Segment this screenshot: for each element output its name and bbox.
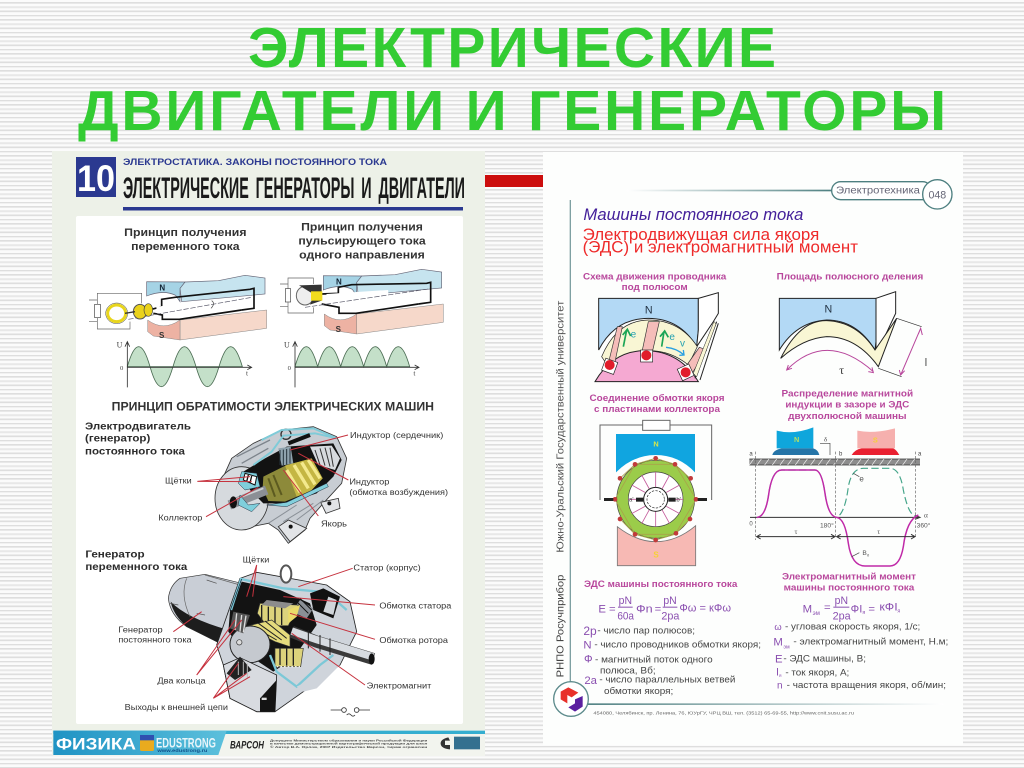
chart: flux and EMF distribution: e [859,474,864,483]
header line and tab: 048 [928,189,946,201]
motor callouts: Индуктор [349,477,390,487]
illustration: AC generator [168,565,375,712]
footer address: 454080, Челябинск, пр. Ленина, 76, ЮУрГУ, ЧРЦ ВШ, тел. (3512) 65-69-55, http://www.cnit.susu.ac.ru [593,710,855,715]
panel: left poster [52,151,485,756]
legend: EMF symbols: полюса, Вб; [600,665,656,675]
symbol: AC source [331,708,370,716]
formula: torque: pN [835,595,848,607]
legend: EMF symbols: - число пар полюсов; [597,625,695,635]
diagram: pulsating current generator [280,269,443,334]
footer banner: www.edustrong.ru [156,748,208,753]
left vertical rule [570,200,571,683]
label: DC motor [85,421,191,458]
heading: winding connection: с пластинами коллектора [594,404,721,414]
poster subtitle: (ЭДС) и электромагнитный момент [583,238,858,257]
legend: EMF symbols: Ф [584,654,593,666]
footer banner [53,731,485,756]
formula: torque: = [824,602,831,614]
generator callouts: Выходы к внешней цепи [125,702,228,712]
generator callouts: Генератор [118,624,163,634]
chart: flux and EMF distribution: δ [867,553,870,558]
poster subtitle [583,225,858,257]
generator callouts: Щётки [243,554,269,564]
generator callouts: Электромагнит [367,680,431,690]
upper diagrams and texts [85,222,434,458]
formula: torque: 2pa [833,610,851,622]
chart: pulsating voltage: 0 [288,365,292,372]
formula: EMF: pN [619,595,632,607]
chart: flux and EMF distribution: 180° [820,522,834,530]
header line and tab [627,180,952,209]
label: DC motor: постоянного тока [85,447,185,458]
chart: flux and EMF distribution: a [749,452,753,458]
diagram: conductor under pole [595,293,718,382]
formula: EMF: Фω = кФω [679,603,731,615]
heading: EMF: ЭДС машины постоянного тока [584,579,738,589]
heading: winding connection: Соединение обмотки якоря [589,393,724,403]
chart: flux and EMF distribution: α [924,510,928,519]
diagram: pulsating current generator: N [336,278,342,287]
chart: alternating voltage: U [117,340,123,349]
label: AC generator: Генератор [85,549,145,560]
heading: alternating current: Принцип получения [124,227,246,239]
diagram: conductor under pole: N [645,304,653,316]
chart: flux and EMF distribution: τ [877,527,880,536]
legend: EMF symbols [583,624,761,696]
poster number badge: 10 [77,158,115,199]
heading: torque: Электромагнитный момент [782,571,917,581]
formula: EMF: Фn [636,603,653,615]
legend: torque symbols: - ток якоря, А; [785,667,849,677]
diagram: pole area: τ [839,363,844,377]
diagram: armature winding: N [653,440,659,449]
chart: pulsating voltage: t [413,369,415,378]
bottom rule [573,703,943,705]
legend: EMF symbols: - число проводников обмотки якоря; [594,640,761,650]
formula: EMF [598,595,731,622]
heading: flux distribution: двухполюсной машины [788,411,907,421]
poster section label: ЭЛЕКТРОСТАТИКА. ЗАКОНЫ ПОСТОЯННОГО ТОКА [123,157,387,168]
legend: EMF symbols: - магнитный поток одного [595,654,713,664]
diagram: alternating current generator [89,275,267,340]
motor leader lines [197,435,348,517]
heading: pulsating current: Принцип получения [301,222,423,234]
formula: torque [803,595,900,622]
panel: left poster: ЭЛЕКТРИЧЕСКИЕ ГЕНЕРАТОРЫ И ДВИГАТЕЛИ [123,172,465,205]
heading: conductor motion: Схема движения проводника [583,271,727,281]
label: DC motor: Электродвигатель [85,421,191,432]
title: ДВИГАТЕЛИ И ГЕНЕРАТОРЫ [78,79,946,143]
label: DC motor: (генератор) [85,434,150,445]
footer banner: ВАРСОН [230,740,265,752]
title [78,16,946,143]
diagram: pole area [779,292,927,377]
formula: EMF: 2pa [661,610,680,622]
generator callouts: Обмотка статора [379,600,452,610]
diagram: alternating current generator: N [159,284,165,293]
motor callouts: (обмотка возбуждения) [349,487,448,497]
diagram: conductor under pole: e [669,332,675,343]
diagram: pulsating current generator: S [336,325,342,334]
generator callouts: постоянного тока [118,635,192,645]
heading: alternating current: переменного тока [131,241,240,253]
logo [554,682,588,716]
motor callouts: Якорь [321,518,348,528]
motor callouts: Коллектор [158,513,203,523]
legend: torque symbols: - частота вращения якоря, об/мин; [787,680,946,690]
lower texts and callouts [85,430,448,573]
chart: flux and EMF distribution: b [839,452,843,458]
label: AC generator: переменного тока [85,562,188,573]
heading: conductor motion [583,271,727,292]
footer banner: в качестве демонстрационной картографической продукции для школ [270,742,427,746]
heading: flux distribution [781,388,913,421]
chart: alternating voltage: t [246,369,248,378]
heading: alternating current [124,227,246,253]
legend: torque symbols: - электромагнитный момент, Н.м; [793,636,948,646]
chart: flux and EMF distribution: B [862,550,867,557]
diagram: alternating current generator: S [159,331,165,340]
generator leader lines [173,565,375,698]
diagram: pole area: N [824,303,832,315]
generator callouts: Два кольца [157,676,206,686]
formula: EMF: pN [663,595,677,607]
legend: torque symbols: n [777,681,783,692]
diagram: conductor under pole: v [680,339,685,350]
chart: flux and EMF distribution: δ [824,437,827,444]
rotated publisher label: РНПО Росучприбор [555,574,567,677]
panel: right poster [543,152,963,745]
red divider bar [480,175,546,187]
chart: alternating voltage: 0 [120,365,124,372]
diagram: armature winding: b' [676,498,681,504]
formula: torque: я [897,608,900,614]
heading: pulsating current: пульсирующего тока [298,235,426,247]
heading: reversibility principle: ПРИНЦИП ОБРАТИМОСТИ ЭЛЕКТРИЧЕСКИХ МАШИН [112,400,434,414]
footer banner: ФИЗИКА [56,734,136,753]
legend: EMF symbols: 2p [583,624,597,638]
header line and tab: Электротехника [836,185,920,196]
legend: torque symbols: - ЭДС машины, В; [783,654,866,664]
legend: torque symbols: - угловая скорость якоря, 1/с; [785,622,920,632]
legend: torque symbols: эм [783,644,790,650]
heading: flux distribution: Распределение магнитной [781,388,913,398]
label: AC generator [85,549,188,573]
illustration: DC motor [215,427,347,543]
heading: winding connection [589,393,724,414]
formula: torque: я [862,610,865,616]
diagram: pole area: l [925,357,927,369]
diagram: conductor under pole: e [631,330,637,341]
heading: torque [782,571,917,593]
legend: EMF symbols: обмотки якоря; [604,686,673,696]
formula: torque: эм [813,611,820,617]
legend: torque symbols [773,622,948,692]
chart: alternating voltage [117,340,252,387]
diagram: armature winding: S [653,551,659,560]
chart: flux and EMF distribution: 0 [749,522,753,528]
motor callouts [158,430,448,528]
rotated university label: Южно-Уральский Государственный университет [556,300,567,553]
heading: conductor motion: под полюсом [622,282,688,292]
formula: torque: M [803,603,812,615]
legend: EMF symbols: - число параллельных ветвей [599,675,735,685]
title: ЭЛЕКТРИЧЕСКИЕ [248,16,776,80]
motor callouts: Индуктор (сердечник) [350,430,443,440]
chart: flux and EMF distribution: τ [795,527,798,536]
footer banner: EDUSTRONG [156,734,216,750]
legend: EMF symbols: 2a [584,675,598,687]
heading: flux distribution: индукции в зазоре и ЭДС [785,400,910,410]
chart: flux and EMF distribution: 360° [917,522,931,530]
diagram: armature winding [600,420,712,566]
legend: torque symbols: ω [774,622,782,632]
heading: torque: машины постоянного тока [784,583,915,593]
chart: flux and EMF distribution [749,427,931,566]
formula: torque: кФI [879,602,898,614]
chart: flux and EMF distribution: N [794,435,799,444]
chart: flux and EMF distribution: S [873,436,878,445]
legend: torque symbols: я [779,673,782,678]
formula: EMF: 60a [617,610,635,622]
poster title: Машины постоянного тока [583,205,803,224]
chart: flux and EMF distribution: a [918,452,922,458]
poster subtitle: Электродвижущая сила якоря [583,225,819,244]
legend: torque symbols: I [776,667,779,679]
legend: torque symbols: M [773,637,783,649]
footer banner: Допущено Министерством образования и науки Российской Федерации [270,738,428,742]
motor callouts: Щётки [165,475,192,485]
heading: pulsating current: одного направления [299,249,425,261]
heading: pulsating current [298,222,426,261]
formula: torque: ФI [851,603,862,615]
heading: pole area: Площадь полюсного деления [777,272,923,282]
chart: pulsating voltage: U [284,340,290,349]
legend: torque symbols: E [775,653,783,665]
diagram: armature winding: a' [629,498,633,504]
generator callouts: Статор (корпус) [353,563,421,573]
generator callouts: Обмотка ротора [379,635,448,645]
formula: torque: = [868,603,875,615]
legend: EMF symbols: N [583,640,592,652]
chart: pulsating voltage [284,340,419,387]
footer banner: © Автор В.А. Орлов, 2007 Издательство Варсон, тираж ограничен [270,745,428,749]
formula: EMF: E = [598,603,616,615]
formula: EMF: = [655,603,662,615]
generator callouts [118,554,452,712]
